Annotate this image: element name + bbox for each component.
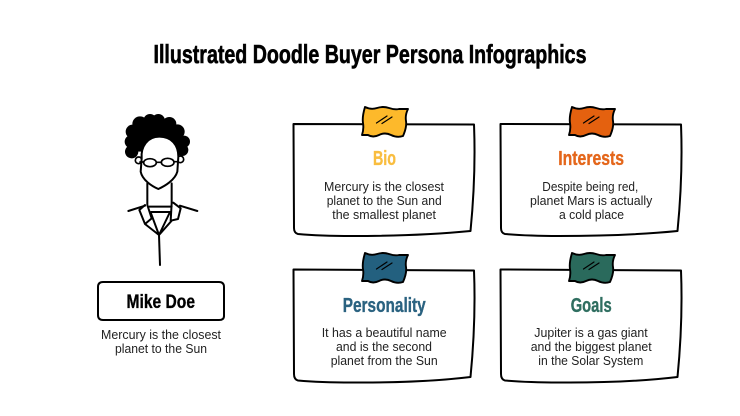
panel: bio <box>294 107 475 236</box>
text: planet to the Sun and <box>327 194 442 208</box>
text <box>324 180 445 222</box>
text <box>531 326 652 368</box>
icon: yellow tape <box>362 107 408 137</box>
panel: goals <box>500 253 682 383</box>
heading: Interests <box>558 148 624 170</box>
text <box>322 326 447 368</box>
icon: blue tape <box>362 253 408 283</box>
panel: interests <box>500 107 682 236</box>
text <box>530 180 653 222</box>
name box <box>98 282 224 320</box>
title: Illustrated Doodle Buyer Persona Infographics <box>154 39 586 69</box>
panel: personality <box>294 253 475 383</box>
name box: Mike Doe <box>126 292 195 313</box>
text: Jupiter is a gas giant <box>534 326 648 340</box>
text: planet Mars is actually <box>530 194 653 208</box>
text: a cold place <box>559 208 624 222</box>
text: Despite being red, <box>542 180 638 194</box>
illustration: persona portrait <box>125 114 197 265</box>
icon: green tape <box>569 253 615 283</box>
icon: orange tape <box>569 107 615 137</box>
text: and the biggest planet <box>531 340 652 354</box>
glasses <box>140 158 178 167</box>
text: It has a beautiful name <box>322 326 447 340</box>
neck and shirt <box>128 183 197 265</box>
text: and is the second <box>336 340 432 354</box>
heading: Personality <box>343 295 426 317</box>
ears <box>135 157 142 164</box>
face <box>141 137 178 189</box>
text: the smallest planet <box>332 208 437 222</box>
text: in the Solar System <box>538 354 643 368</box>
persona description: Mercury is the closest <box>101 328 222 342</box>
heading: Bio <box>373 148 396 170</box>
text: planet from the Sun <box>331 354 438 368</box>
hair <box>125 114 190 158</box>
persona description: planet to the Sun <box>115 342 207 356</box>
text: Mercury is the closest <box>324 180 445 194</box>
persona description <box>101 328 222 356</box>
heading: Goals <box>571 295 612 317</box>
